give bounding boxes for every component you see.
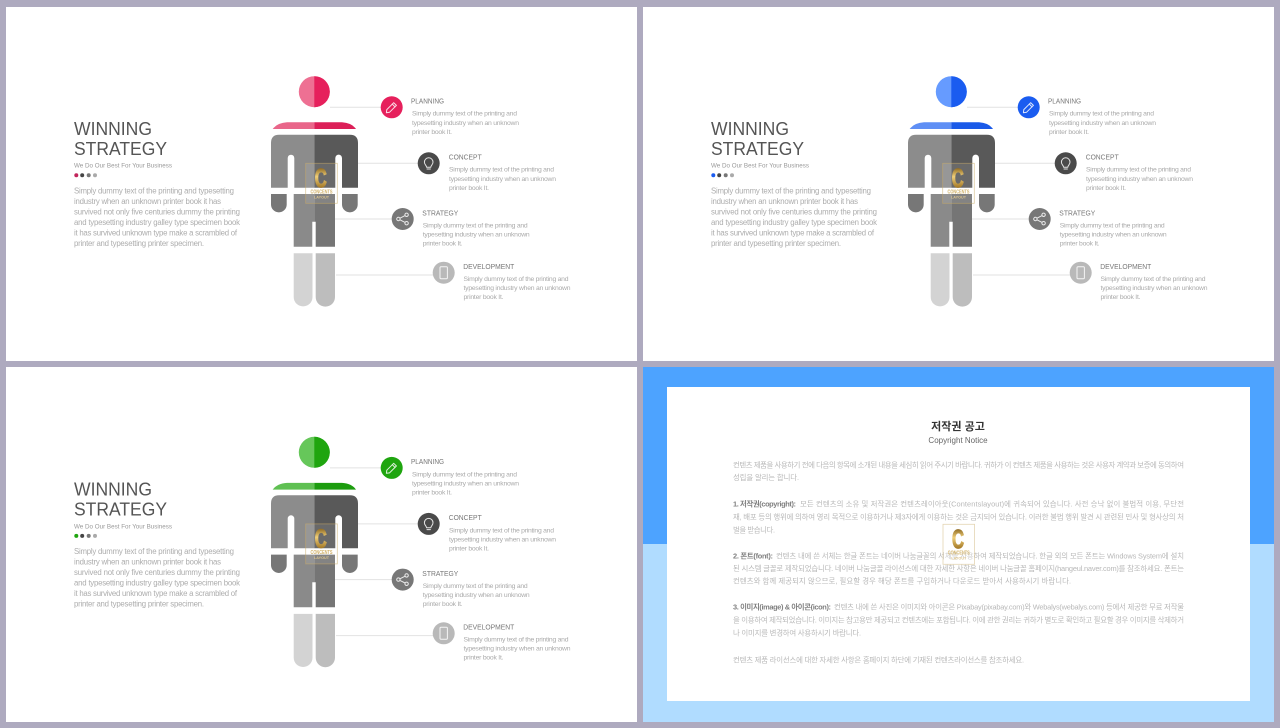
item: strategy: STRATEGY [422, 569, 458, 578]
watermark [943, 163, 974, 203]
item: concept [995, 152, 1193, 192]
body text [711, 186, 877, 248]
item: development [973, 262, 1208, 301]
item: development: Simply dummy text of the printing and [464, 276, 569, 283]
closing text: 컨텐츠 제품 라이선스에 대한 자세한 사항은 홈페이지 하단에 기재된 컨텐츠라이선스를 참조하세요. [733, 656, 1024, 664]
panel: winning strategy red [6, 7, 637, 361]
item: strategy: printer book It. [1060, 240, 1100, 248]
item: development: Simply dummy text of the printing and [464, 637, 569, 644]
section: font [733, 552, 1184, 586]
item: development: typesetting industry when an unknown [1100, 285, 1208, 292]
item: concept: typesetting industry when an unknown [1086, 176, 1193, 183]
item: concept: CONCEPT [449, 152, 482, 161]
body text: it has survived unknown type make a scrambled of [74, 589, 238, 598]
body text: and typesetting industry galley type specimen book [74, 218, 240, 227]
item: development: DEVELOPMENT [463, 262, 515, 271]
title [74, 118, 167, 159]
watermark: CONCENTS [948, 550, 970, 556]
body text [74, 186, 240, 248]
body text [74, 547, 240, 609]
body text: industry when an unknown printer book it has [711, 197, 858, 206]
section: font: 컨텐츠 내에 쓴 서체는 한글 폰트는 네이버 나눔글꼴의 서체를 사용하여 제작되었습니다. 한글 외의 모든 폰트는 Windows System에 설치 [776, 552, 1184, 560]
item: strategy [335, 569, 530, 608]
item: strategy: printer book It. [423, 601, 463, 608]
item: concept: Simply dummy text of the printing and [449, 527, 554, 534]
item: strategy: Simply dummy text of the printing and [423, 222, 528, 229]
title: STRATEGY [711, 138, 804, 159]
item: development: typesetting industry when an unknown [464, 646, 571, 653]
watermark [306, 524, 337, 564]
watermark: LAYOUT [314, 556, 330, 560]
item: development: typesetting industry when an unknown [464, 285, 571, 292]
body text: survived not only five centuries dummy the printing [74, 568, 240, 577]
item: concept: CONCEPT [1086, 152, 1119, 161]
watermark: CONCENTS [310, 190, 333, 196]
item: planning [967, 96, 1156, 136]
item: development: Simply dummy text of the printing and [1100, 276, 1206, 283]
body text: and typesetting industry galley type specimen book [74, 579, 240, 588]
body text: printer and typesetting printer specimen. [74, 239, 204, 248]
dots [74, 534, 97, 538]
item: strategy: STRATEGY [422, 208, 458, 217]
item: concept: typesetting industry when an unknown [449, 176, 556, 183]
watermark [943, 524, 975, 564]
item: planning [330, 96, 519, 136]
item: strategy: printer book It. [423, 240, 463, 248]
item: concept: printer book It. [449, 185, 489, 192]
subheading: Copyright Notice [928, 436, 988, 445]
item: planning: Simply dummy text of the printing and [412, 471, 517, 478]
watermark [306, 163, 337, 203]
body text: and typesetting industry galley type specimen book [711, 218, 877, 227]
panel: winning strategy blue [643, 7, 1274, 361]
item: planning: typesetting industry when an unknown [412, 120, 519, 127]
watermark: C [315, 163, 327, 193]
body text: survived not only five centuries dummy the printing [74, 208, 240, 216]
item: strategy [335, 208, 530, 248]
body text: printer and typesetting printer specimen. [74, 600, 204, 609]
dots [74, 173, 97, 177]
title [74, 479, 167, 520]
item: strategy: STRATEGY [1059, 208, 1095, 217]
item: concept: Simply dummy text of the printing and [1086, 167, 1191, 174]
item: planning: printer book It. [412, 490, 452, 497]
title [711, 118, 804, 159]
watermark: LAYOUT [951, 556, 967, 560]
item: concept: CONCEPT [449, 513, 482, 522]
subtitle: We Do Our Best For Your Business [74, 523, 173, 530]
intro text: 컨텐츠 제품을 사용하기 전에 다음의 항목에 소개된 내용을 세심히 읽어 주시기 바랍니다. 귀하가 이 컨텐츠 제품을 사용하는 것은 사용자 계약과 보증에 동의하여 [733, 460, 1184, 470]
item: development: printer book It. [1100, 294, 1141, 301]
title: STRATEGY [74, 499, 167, 520]
section: font: 컨텐츠와 함께 제공되지 않으므로, 필요할 경우 해당 폰트를 구입하거나 다운로드 받아서 사용하시기 바랍니다. [733, 576, 1071, 586]
item: concept: printer book It. [449, 546, 489, 553]
item: strategy: typesetting industry when an unknown [1060, 232, 1167, 238]
subtitle: We Do Our Best For Your Business [711, 163, 810, 170]
item: planning: typesetting industry when an unknown [412, 481, 519, 488]
section: copyright: 1. 저작권(copyright): [733, 500, 796, 508]
section: image and icon: 나 이미지를 변경하여 사용하시기 바랍니다. [733, 628, 861, 638]
body text: Simply dummy text of the printing and typesetting [74, 547, 234, 556]
item: planning: PLANNING [1048, 96, 1081, 105]
title: WINNING [711, 118, 789, 139]
item: strategy: Simply dummy text of the printing and [1060, 222, 1165, 229]
item: planning: PLANNING [411, 457, 444, 466]
item: concept [358, 513, 556, 553]
watermark: LAYOUT [951, 196, 967, 200]
watermark: C [952, 163, 964, 193]
body text: industry when an unknown printer book it has [74, 558, 221, 567]
section: image and icon: 을 이용하여 제작되었습니다. 이미지는 참고용만 제공되고 컨텐츠에는 포함됩니다. 이에 관한 권리는 귀하가 별도로 확인하고 필요할 경우 이미지를 삭제하거 [733, 616, 1184, 624]
section: copyright: 모든 컨텐츠의 소유 및 저작권은 컨텐츠레이아웃(Contentslayout)에 귀속되어 있습니다. 사전 승낙 없이 불법적 이용, 무단전 [800, 500, 1184, 508]
panel: copyright notice [643, 367, 1274, 722]
human figure [908, 76, 995, 307]
item: development: DEVELOPMENT [463, 623, 515, 632]
item: development: printer book It. [464, 294, 504, 301]
body text: survived not only five centuries dummy the printing [711, 208, 877, 216]
item: strategy [972, 208, 1167, 248]
human figure [271, 437, 358, 667]
section: font: 된 시스템 글꼴로 제작되었습니다. 네이버 나눔글꼴 라이선스에 대한 자세한 사항은 네이버 나눔글꼴 홈페이지(hangeul.naver.com)를 참조하세요. 폰트는 [733, 564, 1184, 573]
item: planning: printer book It. [1049, 129, 1089, 136]
section: image and icon [733, 602, 1184, 638]
item: planning: typesetting industry when an unknown [1049, 120, 1156, 127]
body text: Simply dummy text of the printing and typesetting [74, 186, 234, 196]
body text: it has survived unknown type make a scrambled of [74, 228, 238, 238]
body text: Simply dummy text of the printing and typesetting [711, 186, 871, 196]
item: strategy: typesetting industry when an unknown [423, 592, 530, 599]
item: development: printer book It. [464, 655, 504, 662]
watermark: CONCENTS [948, 190, 970, 196]
watermark: C [315, 524, 327, 554]
subtitle: We Do Our Best For Your Business [74, 163, 173, 170]
body text: industry when an unknown printer book it has [74, 197, 221, 206]
item: concept: printer book It. [1086, 185, 1126, 192]
title: WINNING [74, 118, 152, 139]
section: copyright: 재, 배포 등의 행위에 의하여 영리 목적으로 이용하거나 제3자에게 이용하는 것은 금지되어 있습니다. 이러한 불법 행위 발견 시 관련된 민사 및 형사상의 처 [733, 512, 1184, 522]
item: concept [358, 152, 556, 192]
item: strategy: Simply dummy text of the printing and [423, 583, 528, 590]
intro text [733, 460, 1184, 482]
item: development [336, 622, 571, 662]
item: development [336, 262, 571, 301]
item: planning: printer book It. [412, 129, 452, 136]
watermark: LAYOUT [314, 196, 330, 200]
heading: 저작권 공고 [931, 419, 985, 433]
body text: printer and typesetting printer specimen. [711, 239, 841, 248]
section: font: 2. 폰트(font): [733, 552, 773, 560]
section: image and icon: 3. 이미지(image) & 아이콘(icon): [733, 602, 831, 612]
section: copyright [733, 500, 1184, 534]
item: planning: PLANNING [411, 96, 444, 105]
panel: winning strategy green [6, 367, 637, 722]
watermark: CONCENTS [310, 550, 333, 556]
item: planning [330, 457, 519, 497]
section: copyright: 벌을 받습니다. [733, 526, 775, 534]
item: planning: Simply dummy text of the printing and [412, 111, 517, 118]
item: concept: typesetting industry when an unknown [449, 537, 556, 544]
title: STRATEGY [74, 138, 167, 159]
title: WINNING [74, 479, 152, 500]
body text: it has survived unknown type make a scrambled of [711, 228, 875, 238]
watermark: C [952, 524, 964, 554]
dots [711, 173, 734, 177]
section: image and icon: 컨텐츠 내에 쓴 사진은 이미지와 아이콘은 Pixabay(pixabay.com)와 Webalys(webalys.com) 등에서 제공한 무료 저작물 [834, 602, 1184, 612]
item: planning: Simply dummy text of the printing and [1049, 111, 1154, 118]
intro text: 성립을 알리는 합니다. [733, 473, 799, 482]
item: development: DEVELOPMENT [1100, 262, 1152, 271]
item: concept: Simply dummy text of the printing and [449, 167, 554, 174]
item: strategy: typesetting industry when an unknown [423, 232, 530, 238]
human figure [271, 76, 358, 307]
